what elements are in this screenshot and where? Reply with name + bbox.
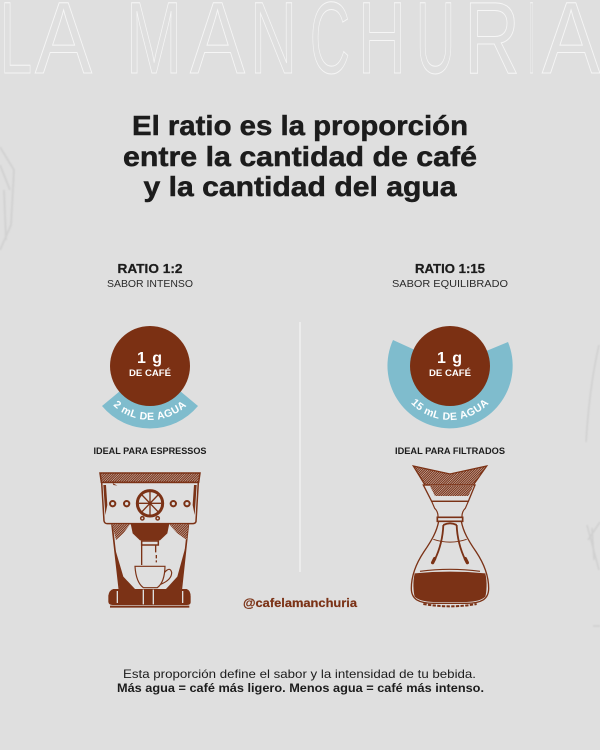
title: entre la cantidad de café — [123, 141, 477, 172]
water sector 2 mL: 2 mL DE AGUA — [113, 400, 186, 420]
title: El ratio es la proporción — [132, 110, 468, 141]
footer text — [117, 667, 484, 695]
water sector 15 mL: 15 mL DE AGUA — [411, 399, 489, 420]
ideal label espressos: IDEAL PARA ESPRESSOS — [94, 446, 206, 457]
water sector 15 mL — [388, 340, 513, 428]
icon: chemex — [411, 466, 489, 606]
ratio 1:2 subtitle: SABOR INTENSO — [107, 278, 193, 290]
ratio 1:2 heading: RATIO 1:2 — [118, 261, 182, 276]
coffee circle: 1 g — [437, 350, 463, 367]
decorative sketch: right edge — [586, 345, 600, 626]
title: y la cantidad del agua — [144, 171, 457, 202]
coffee circle — [410, 326, 490, 406]
coffee circle — [110, 326, 190, 406]
icon: espresso machine — [100, 473, 200, 607]
social handle: @cafelamanchuria — [243, 596, 357, 610]
coffee circle: DE CAFÉ — [129, 368, 171, 378]
coffee circle: 1 g — [137, 350, 163, 367]
coffee circle: DE CAFÉ — [429, 368, 471, 378]
brand wordmark outline — [0, 0, 600, 95]
center divider — [300, 322, 301, 572]
footer text: Más agua = café más ligero. Menos agua = café más intenso. — [117, 681, 484, 695]
ratio 1:15 heading: RATIO 1:15 — [415, 261, 485, 276]
panel: ratio 1:2 — [94, 261, 206, 608]
title — [123, 110, 477, 202]
water sector 2 mL — [102, 392, 198, 428]
panel: ratio 1:15 — [388, 261, 513, 608]
footer text: Esta proporción define el sabor y la intensidad de tu bebida. — [123, 667, 476, 681]
ratio 1:15 subtitle: SABOR EQUILIBRADO — [392, 278, 508, 290]
ideal label filtrados: IDEAL PARA FILTRADOS — [395, 446, 505, 457]
decorative sketch: left edge — [0, 147, 14, 250]
